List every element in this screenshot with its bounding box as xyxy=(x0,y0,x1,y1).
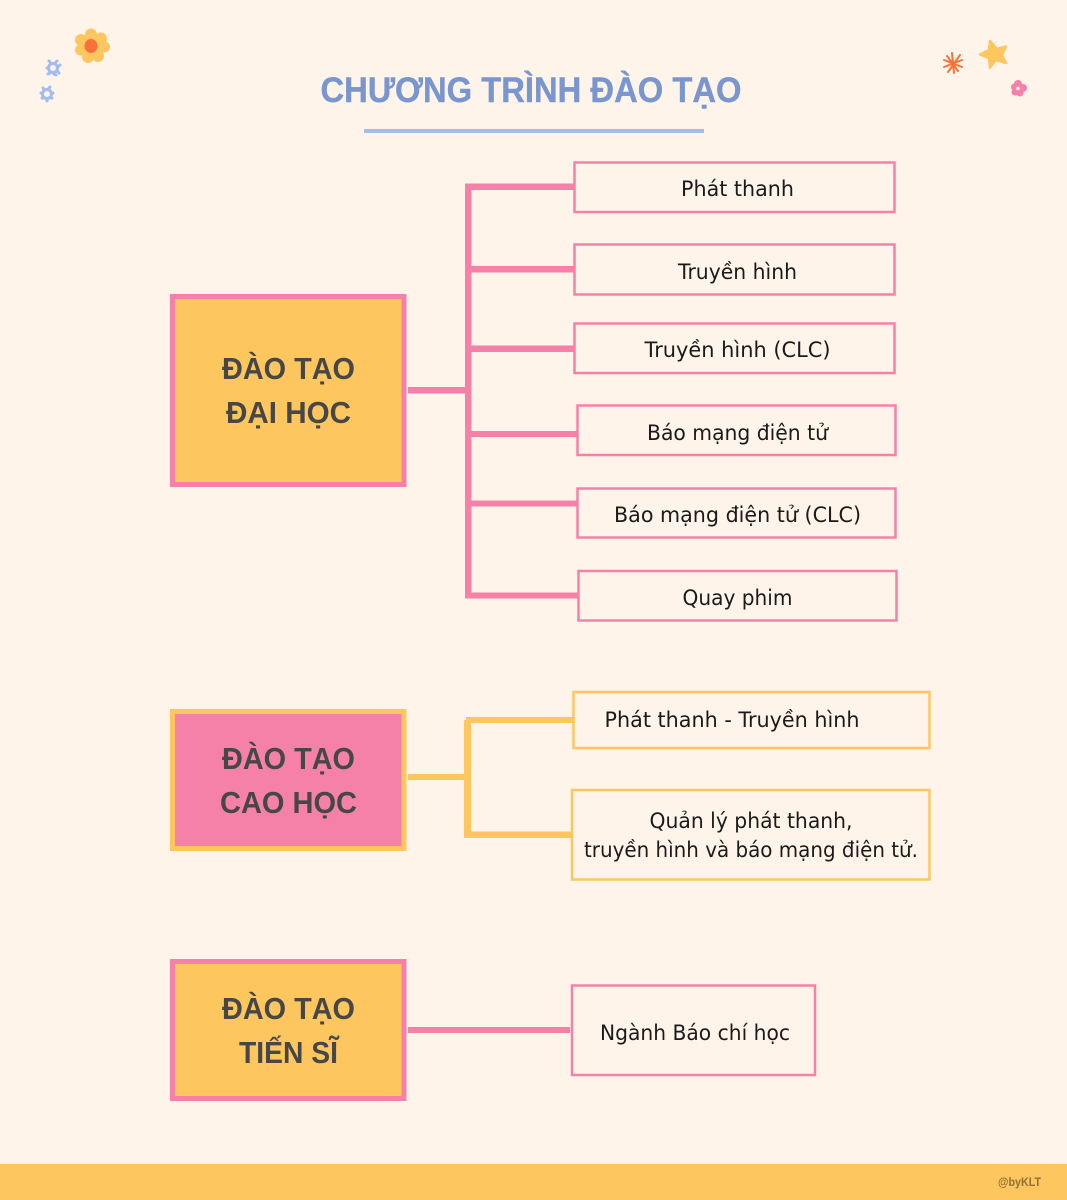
box: Truyền hình: Truyền hình xyxy=(677,260,797,284)
box: Phát thanh - Truyền hình xyxy=(574,692,930,748)
connector: cao học xyxy=(408,717,573,838)
panel: đào tạo đại học: ĐẠI HỌC xyxy=(226,395,351,430)
box: Truyền hình xyxy=(574,244,894,294)
panel: đào tạo đại học xyxy=(172,296,404,484)
box: Báo mạng điện tử (CLC) xyxy=(578,488,896,538)
box: Báo mạng điện tử (CLC): Báo mạng điện tử (CLC) xyxy=(614,503,861,527)
title underline xyxy=(364,129,704,133)
box: Ngành Báo chí học xyxy=(572,986,815,1075)
panel: đào tạo tiến sĩ xyxy=(172,962,404,1098)
box: Quay phim xyxy=(578,571,896,620)
box: Truyền hình (CLC): Truyền hình (CLC) xyxy=(644,338,830,362)
icon: orange asterisk xyxy=(944,53,962,73)
icon: yellow star xyxy=(980,41,1006,68)
box: Quản lý phát thanh, truyền hình và báo mạng điện tử xyxy=(572,790,930,880)
icon: small blue flower bottom xyxy=(41,87,53,101)
box: Ngành Báo chí học: Ngành Báo chí học xyxy=(600,1021,790,1045)
icon: pink flower xyxy=(1011,80,1027,96)
connector: đại học xyxy=(408,184,578,598)
panel: đào tạo cao học: ĐÀO TẠO xyxy=(222,741,355,776)
box: Truyền hình (CLC) xyxy=(574,324,894,373)
icon: small blue flower top xyxy=(47,61,60,75)
connector: tiến sĩ xyxy=(408,1027,570,1033)
box: Quay phim: Quay phim xyxy=(682,586,792,610)
box: Báo mạng điện tử: Báo mạng điện tử xyxy=(647,421,830,445)
panel: đào tạo cao học xyxy=(172,712,404,848)
footer credit: @byKLT xyxy=(998,1177,1041,1189)
footer bar xyxy=(0,1164,1067,1200)
panel: đào tạo cao học: CAO HỌC xyxy=(220,785,357,820)
panel: đào tạo đại học: ĐÀO TẠO xyxy=(222,351,355,386)
box: Báo mạng điện tử xyxy=(578,406,896,455)
box: Phát thanh - Truyền hình: Phát thanh - Truyền hình xyxy=(604,708,860,732)
box: Quản lý phát thanh, truyền hình và báo mạng điện tử: truyền hình và báo mạng điện tử. xyxy=(584,838,918,862)
box: Quản lý phát thanh, truyền hình và báo mạng điện tử: Quản lý phát thanh, xyxy=(650,809,852,833)
panel: đào tạo tiến sĩ: TIẾN SĨ xyxy=(239,1035,340,1070)
icon: orange flower xyxy=(75,28,110,63)
panel: đào tạo tiến sĩ: ĐÀO TẠO xyxy=(222,991,355,1026)
box: Phát thanh: Phát thanh xyxy=(681,177,794,201)
title: CHƯƠNG TRÌNH ĐÀO TẠO xyxy=(320,70,742,110)
box: Phát thanh xyxy=(574,162,894,212)
